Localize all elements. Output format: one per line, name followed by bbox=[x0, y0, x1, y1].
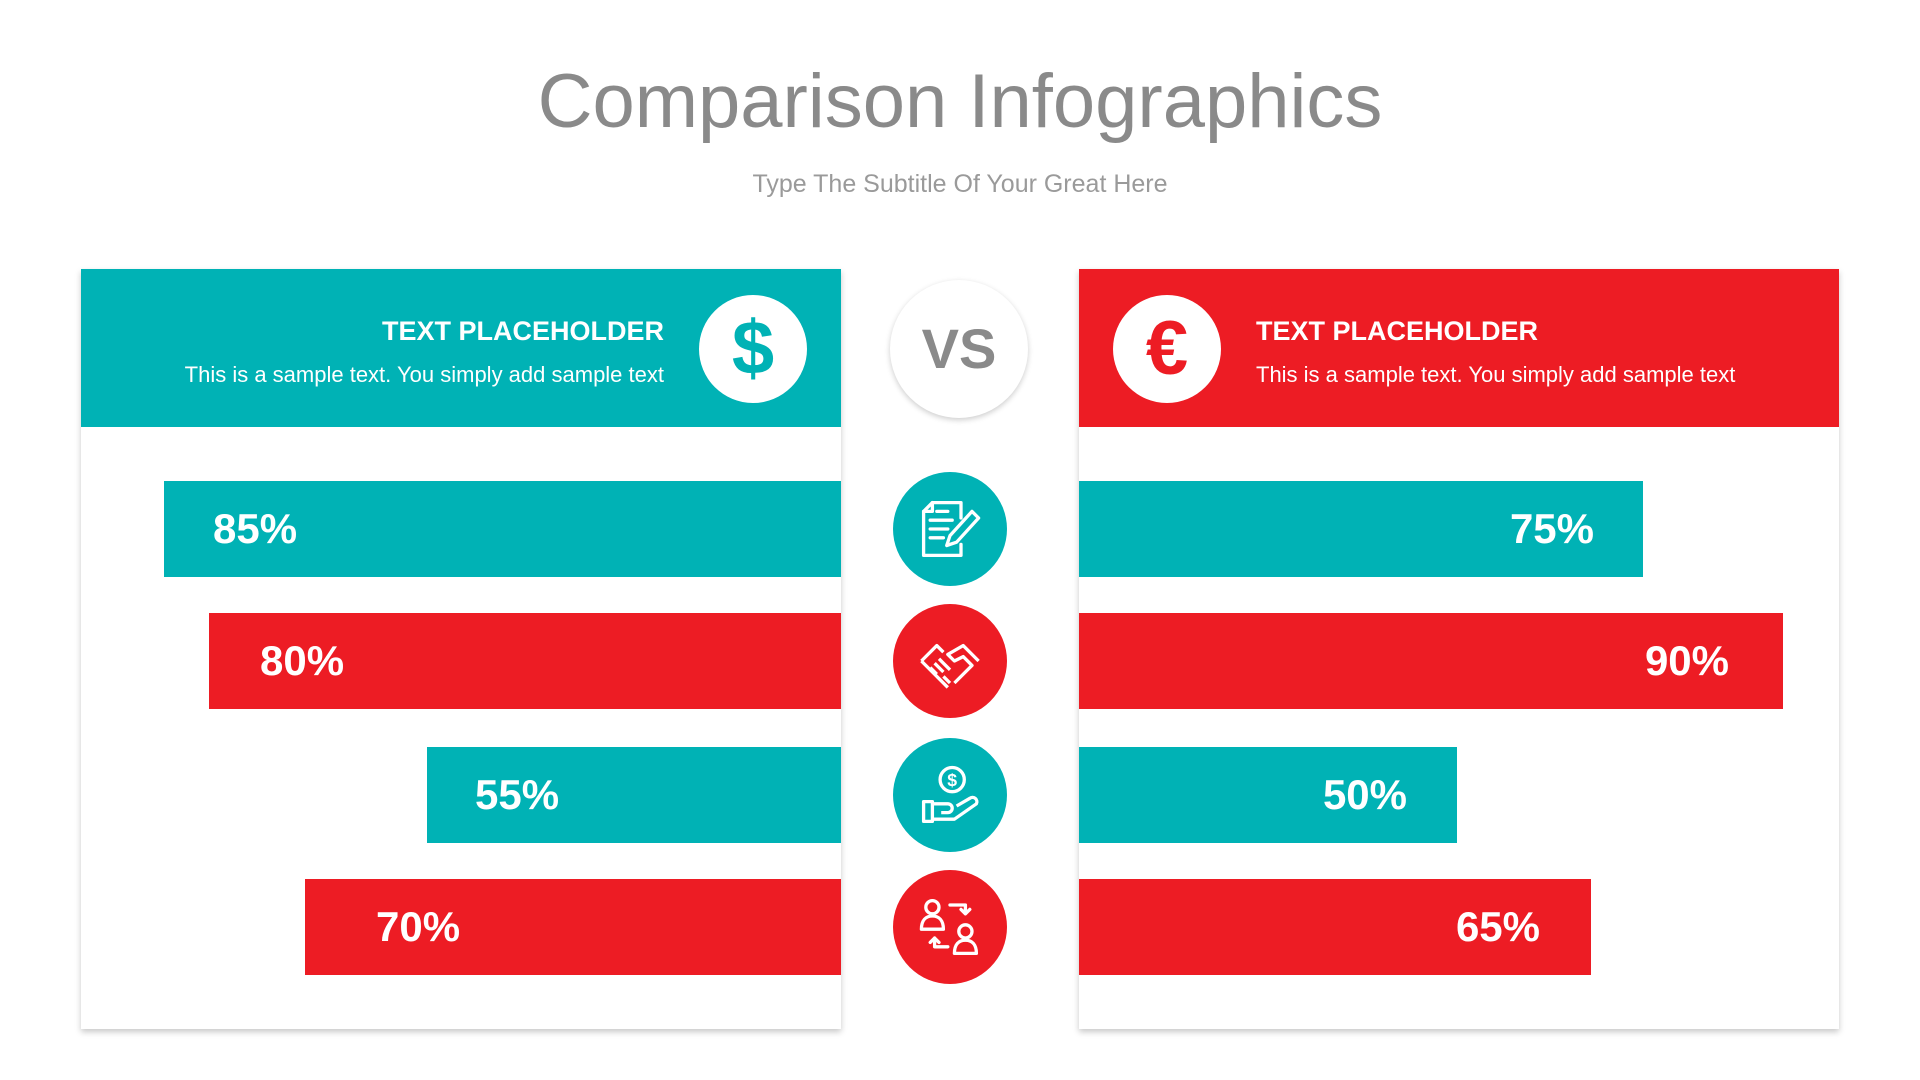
VS circle: VS bbox=[922, 317, 996, 380]
icon: dollar: $ bbox=[732, 306, 774, 391]
left bar 80%: 80% bbox=[260, 637, 344, 684]
left bar 85% bbox=[164, 481, 841, 577]
title: Comparison Infographics bbox=[538, 59, 1382, 144]
icon: people exchange bbox=[893, 870, 1007, 984]
icon: euro: € bbox=[1146, 306, 1188, 391]
text right: This is a sample text. You simply add sample text bbox=[1256, 362, 1735, 387]
left bar 70%: 70% bbox=[376, 903, 460, 950]
icon: document pen bbox=[893, 472, 1007, 586]
right bar 75% bbox=[1079, 481, 1643, 577]
left bar 80% bbox=[209, 613, 841, 709]
subtitle: Type The Subtitle Of Your Great Here bbox=[752, 170, 1168, 198]
heading right: TEXT PLACEHOLDER bbox=[1256, 316, 1538, 346]
left bar 85%: 85% bbox=[213, 505, 297, 552]
icon: dollar bbox=[699, 295, 807, 403]
right bar 75%: 75% bbox=[1510, 505, 1594, 552]
icon: euro bbox=[1113, 295, 1221, 403]
icon: handshake bbox=[893, 604, 1007, 718]
right bar 90% bbox=[1079, 613, 1783, 709]
text left: This is a sample text. You simply add sample text bbox=[185, 362, 664, 387]
header: left bbox=[81, 269, 841, 427]
header: right bbox=[1079, 269, 1839, 427]
right bar 65%: 65% bbox=[1456, 903, 1540, 950]
right bar 90%: 90% bbox=[1645, 637, 1729, 684]
right bar 50% bbox=[1079, 747, 1457, 843]
right bar 65% bbox=[1079, 879, 1591, 975]
icon: hand with coin bbox=[893, 738, 1007, 852]
left bar 70% bbox=[305, 879, 841, 975]
left bar 55% bbox=[427, 747, 841, 843]
right bar 50%: 50% bbox=[1323, 771, 1407, 818]
left bar 55%: 55% bbox=[475, 771, 559, 818]
panel: left bbox=[81, 269, 841, 1029]
panel: right bbox=[1079, 269, 1839, 1029]
VS circle bbox=[890, 280, 1028, 418]
icon: hand with coin: $ bbox=[947, 770, 957, 790]
heading left: TEXT PLACEHOLDER bbox=[382, 316, 664, 346]
